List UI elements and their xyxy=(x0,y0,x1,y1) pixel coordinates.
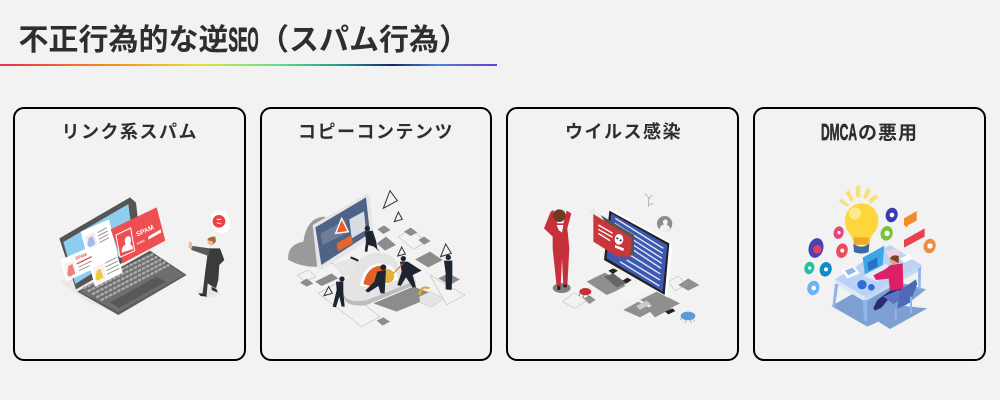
illustration: laptop with spam cards: SPAM xyxy=(74,252,88,261)
heading: DMCA abuse: DMCA xyxy=(821,119,857,145)
illustration: desk worker under lightbulb xyxy=(803,186,937,329)
person xyxy=(198,286,219,298)
title: 不正行為的な逆 xyxy=(18,24,228,57)
heading: virus infection: ウイルス感染 xyxy=(565,121,682,142)
illustration: laptop with spam cards xyxy=(59,197,234,315)
panel: link spam xyxy=(14,108,245,360)
floating icons xyxy=(806,236,826,260)
panel: copied content xyxy=(261,108,491,360)
illustration: infected monitor and worried person xyxy=(544,193,699,323)
person xyxy=(553,283,571,293)
illustration: attackers on a cloud and monitor xyxy=(288,191,465,327)
title underline xyxy=(0,64,497,66)
title xyxy=(18,21,469,58)
illustration: laptop with spam cards: SPAM xyxy=(135,224,156,238)
title: SEO xyxy=(228,21,258,58)
panel: DMCA abuse xyxy=(754,108,985,360)
heading: link spam: リンク系スパム xyxy=(62,122,198,142)
heading: copied content: コピーコンテンツ xyxy=(298,122,454,142)
title: （スパム行為） xyxy=(259,24,469,57)
heading: DMCA abuse: の悪用 xyxy=(858,123,918,144)
illustration: laptop with spam cards: WWW xyxy=(136,239,146,246)
panel: virus infection xyxy=(507,108,738,360)
